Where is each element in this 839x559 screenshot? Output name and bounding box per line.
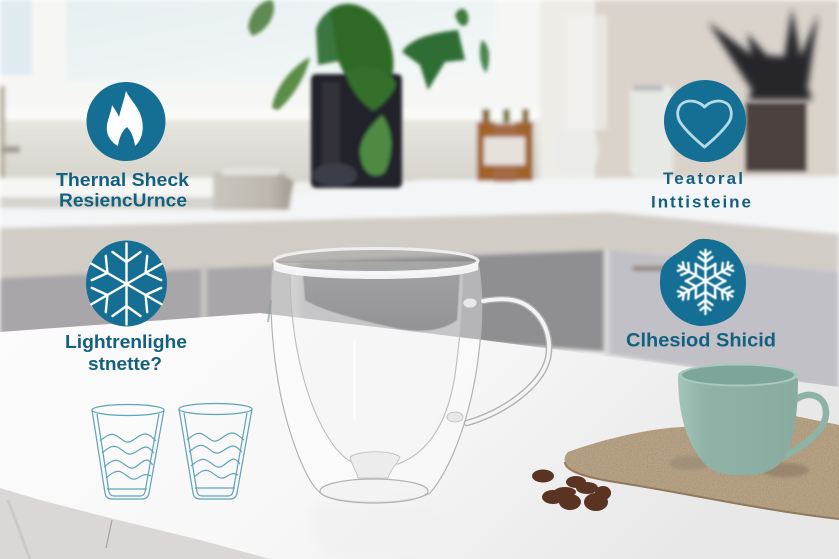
cup body (678, 376, 798, 475)
rim (274, 248, 478, 274)
icon: detailed snowflake (660, 239, 746, 326)
green ceramic cup (678, 364, 826, 475)
right pot (745, 102, 807, 172)
icon: cup outline with waves, left (92, 404, 164, 499)
cup interior (682, 366, 794, 384)
amber bottles (477, 109, 533, 182)
cup handle (783, 395, 826, 457)
heading: teatoral: Inttisteine (651, 192, 751, 212)
dark plant vase (311, 67, 402, 188)
heading: thermal shock resilience (56, 170, 190, 210)
base (320, 479, 428, 503)
heading: cohesion shield: Clhesiod Shicid (626, 330, 776, 352)
handle (467, 299, 549, 423)
heading: lightweight strength: stnette? (88, 354, 162, 374)
foreground marble counter (0, 313, 839, 559)
cup rim (678, 364, 798, 386)
right spiky plant (708, 8, 818, 100)
woven placemat (565, 415, 839, 519)
heading: teatoral: Teatoral (663, 169, 743, 188)
heading: lightweight strength (65, 332, 187, 374)
inner wall (290, 272, 463, 464)
stem (350, 452, 400, 478)
handle joints (463, 298, 477, 308)
counter front edge (0, 488, 270, 559)
coffee beans (532, 470, 611, 511)
dark counter reflection (303, 272, 460, 331)
heading: thermal shock resilience: Thernal Sheck (56, 170, 190, 190)
icon: flame (86, 82, 166, 161)
heading: lightweight strength: Lightrenlighe (65, 332, 187, 352)
sink bowl (213, 169, 294, 210)
icon: heart (664, 80, 746, 162)
right jars (551, 15, 673, 178)
glass mug (268, 248, 549, 503)
icon: cup outline with waves, right (179, 404, 252, 499)
icon: snowflake (84, 240, 169, 326)
heading: thermal shock resilience: ResiencUrnce (59, 190, 187, 210)
mug body (271, 262, 482, 502)
center plant leaves (248, 0, 489, 110)
heading: teatoral (651, 169, 751, 212)
